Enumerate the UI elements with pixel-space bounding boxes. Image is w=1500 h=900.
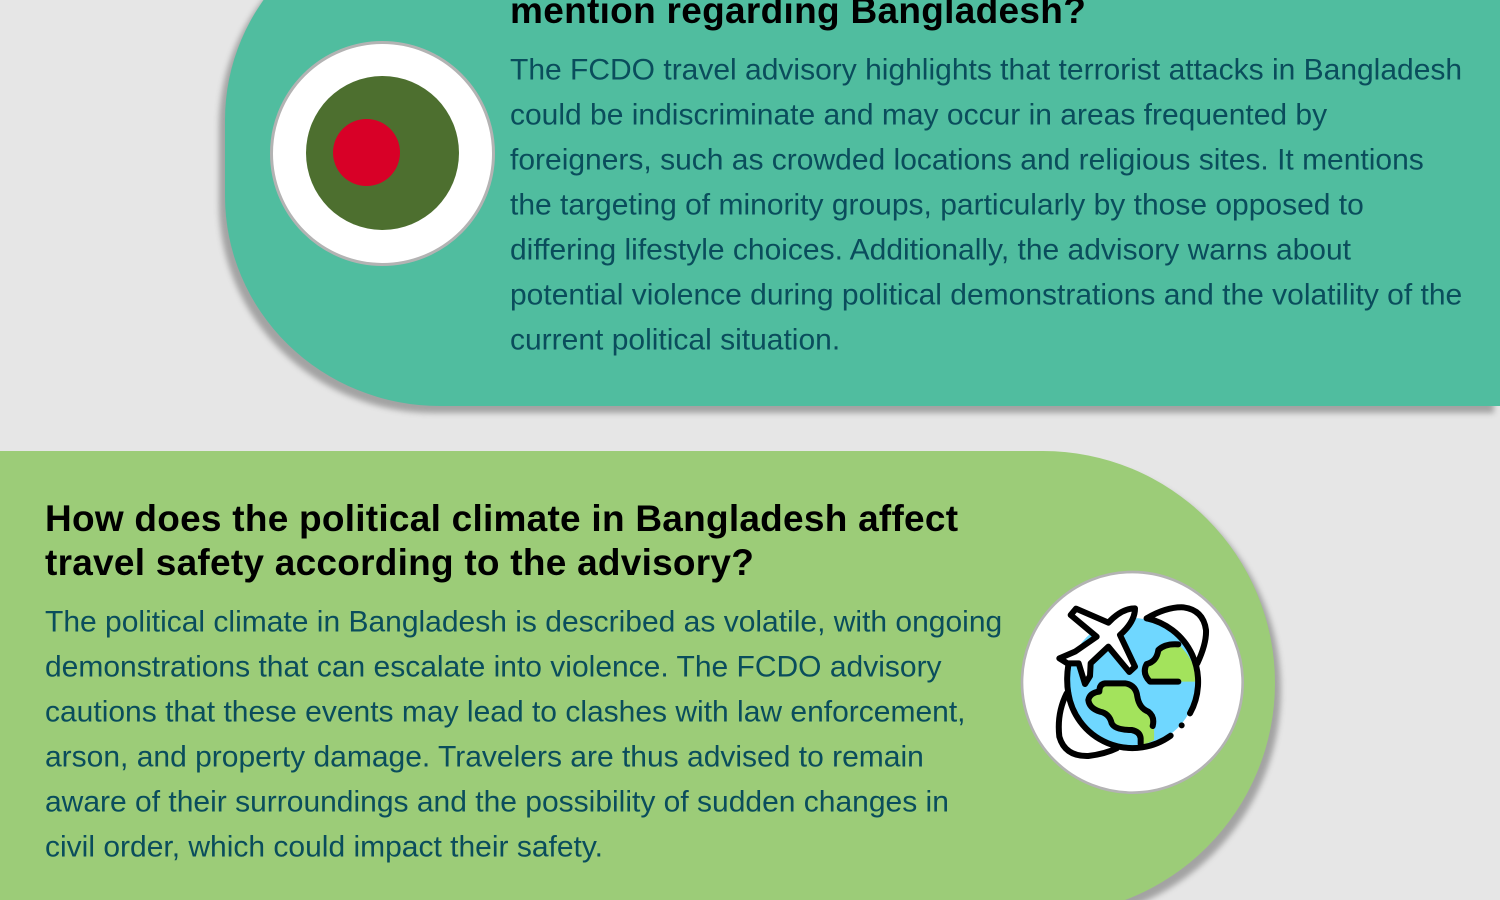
- panel body text: [45, 606, 1002, 864]
- icon: globe and airplane badge: [1020, 570, 1244, 794]
- panel body text: The political climate in Bangladesh is described as volatile, with ongoing: [45, 606, 1002, 638]
- panel body text: cautions that these events may lead to clashes with law enforcement,: [45, 696, 966, 728]
- orbit ring: [1059, 607, 1206, 756]
- panel body text: could be indiscriminate and may occur in areas frequented by: [510, 98, 1327, 132]
- airplane: [1059, 608, 1135, 684]
- panel heading: [45, 498, 958, 583]
- panel: terrorism advisory: [225, 0, 1500, 406]
- panel body text: The FCDO travel advisory highlights that terrorist attacks in Bangladesh: [510, 54, 1462, 86]
- panel body text: aware of their surroundings and the possibility of sudden changes in: [45, 786, 949, 818]
- panel body text: civil order, which could impact their safety.: [45, 830, 603, 864]
- panel heading: travel safety according to the advisory?: [45, 542, 754, 583]
- panel body text: arson, and property damage. Travelers are thus advised to remain: [45, 740, 924, 774]
- panel body text: foreigners, such as crowded locations and religious sites. It mentions: [510, 144, 1424, 176]
- panel body text: [510, 54, 1462, 356]
- panel body text: differing lifestyle choices. Additionally, the advisory warns about: [510, 234, 1351, 266]
- panel heading: How does the political climate in Bangladesh affect: [45, 498, 958, 539]
- panel body text: the targeting of minority groups, particularly by those opposed to: [510, 188, 1364, 222]
- icon: Bangladesh flag badge: [270, 41, 495, 266]
- panel body text: current political situation.: [510, 324, 840, 356]
- globe: [1059, 607, 1206, 756]
- panel body text: demonstrations that can escalate into violence. The FCDO advisory: [45, 650, 942, 684]
- panel body text: potential violence during political demonstrations and the volatility of the: [510, 278, 1462, 312]
- flag red disc: [332, 119, 400, 186]
- flag green disc: [306, 76, 459, 230]
- panel: political climate: [0, 451, 1275, 900]
